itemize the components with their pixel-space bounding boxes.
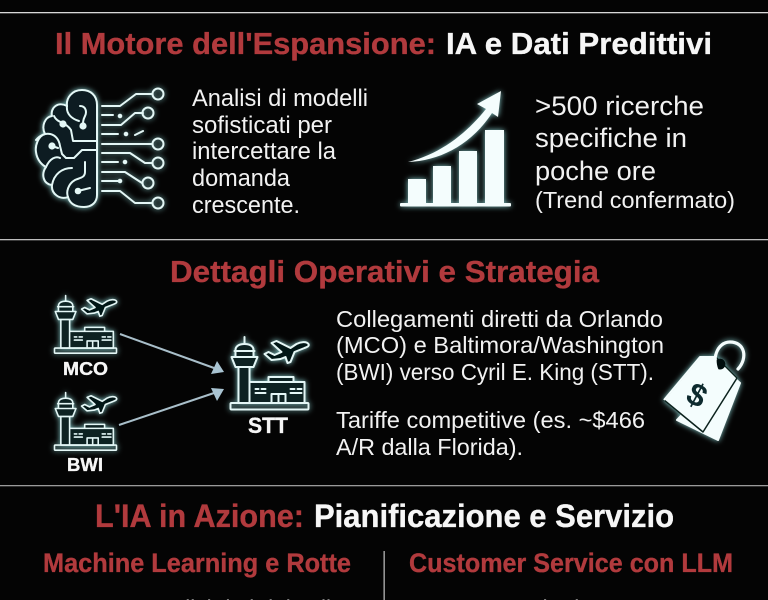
- label: BWI: BWI: [67, 455, 103, 475]
- heading: IA in azione: [95, 498, 674, 534]
- heading: IA in azione: Pianificazione e Servizio: [314, 498, 674, 534]
- text: analisi di modelli: sofisticati per: [192, 112, 332, 139]
- top rule: [0, 12, 768, 13]
- icon: airport MCO: [54, 296, 117, 353]
- text: tariffe competitive: [336, 407, 645, 460]
- text: collegamenti diretti: (MCO) e Baltimora/Washington: [336, 332, 664, 358]
- section rule 3: [0, 485, 768, 486]
- section rule 2: [0, 239, 768, 240]
- text: ricerche specifiche: poche ore: [535, 156, 656, 186]
- text: tariffe competitive: A/R dalla Florida).: [336, 434, 523, 460]
- heading: IA in azione: L'IA in Azione:: [95, 498, 304, 534]
- arrow: MCO to STT: [120, 334, 224, 374]
- heading: motore dell'espansione: [55, 26, 712, 61]
- icon: airport STT: [230, 337, 309, 410]
- label: MCO: MCO: [63, 359, 108, 379]
- panel: IA in azione: [43, 498, 733, 600]
- text: tariffe competitive: Tariffe competitive (es. ~$466: [336, 407, 645, 433]
- arrow: BWI to STT: [119, 388, 224, 425]
- text: analisi di modelli: [192, 85, 368, 219]
- heading: motore dell'espansione: Il Motore dell'Espansione:: [55, 26, 436, 61]
- label: STT: STT: [248, 413, 289, 438]
- icon: circuit brain: [36, 88, 164, 208]
- text: ricerche specifiche: (Trend confermato): [535, 187, 735, 213]
- icon: price tag: $: [681, 375, 713, 415]
- text: ricerche specifiche: >500 ricerche: [535, 91, 704, 121]
- text: analisi di modelli: crescente.: [192, 192, 300, 219]
- panel: motore dell'espansione: [36, 26, 735, 219]
- heading: dettagli operativi: Dettagli Operativi e Strategia: [170, 254, 600, 289]
- icon: price tag: [664, 342, 744, 440]
- text: ricerche specifiche: [535, 91, 735, 213]
- text: analisi di modelli: intercettare la: [192, 138, 336, 165]
- text: analisi di modelli: domanda: [192, 165, 290, 192]
- text: collegamenti diretti: [336, 306, 664, 385]
- text: collegamenti diretti: (BWI) verso Cyril E. King (STT).: [336, 359, 654, 385]
- text: analisi di modelli: Analisi di modelli: [192, 85, 368, 112]
- subheading: customer service: Customer Service con LLM: [409, 548, 733, 578]
- text: ricerche specifiche: specifiche in: [535, 123, 687, 153]
- icon: airport BWI: [54, 393, 117, 450]
- icon: growth bar chart: [400, 91, 511, 206]
- text: collegamenti diretti: Collegamenti diretti da Orlando: [336, 306, 663, 332]
- subheading: machine learning: Machine Learning e Rotte: [43, 548, 351, 578]
- heading: motore dell'espansione: IA e Dati Predittivi: [446, 26, 712, 61]
- panel: dettagli operativi: [54, 254, 744, 475]
